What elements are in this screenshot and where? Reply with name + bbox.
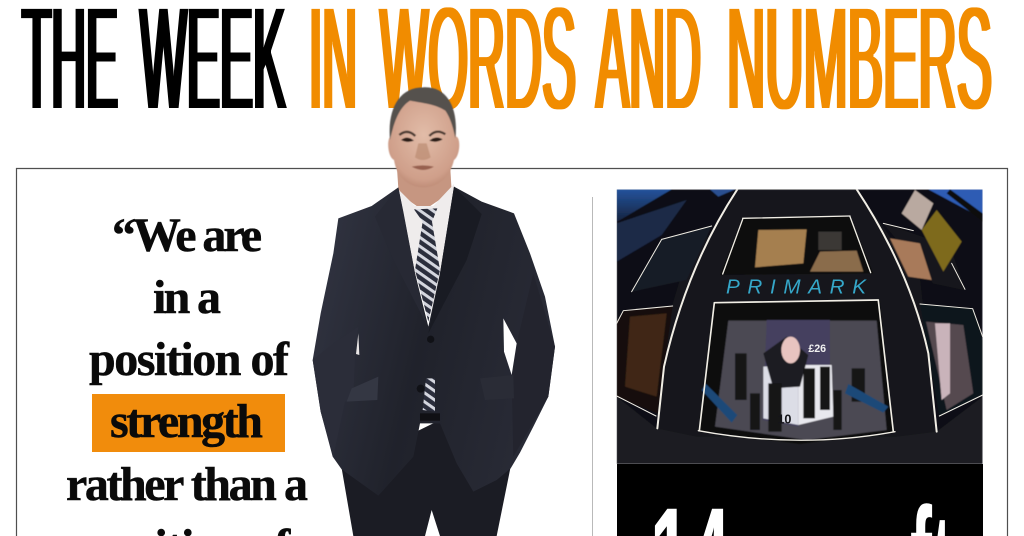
- price text: £26: [808, 343, 826, 355]
- left lower window: [617, 307, 673, 413]
- hair: [390, 87, 456, 140]
- pocket flaps: [347, 377, 378, 402]
- eyebrows: [399, 132, 445, 136]
- upper window: [720, 217, 873, 275]
- window frame light strips: [617, 189, 983, 440]
- sleeve shadow right: [512, 273, 555, 457]
- main shop window: [698, 301, 893, 444]
- blue diagonal panels: [702, 384, 737, 423]
- buttons: [427, 336, 434, 343]
- sky and building: [617, 189, 983, 464]
- quote text: “We are: [112, 209, 262, 262]
- panel: main frame: [16, 168, 1008, 536]
- title: [22, 0, 992, 141]
- quote text: strength: [110, 395, 263, 448]
- facade: [657, 189, 937, 447]
- window poster: [763, 320, 830, 427]
- head: [388, 87, 459, 187]
- left upper window: [632, 226, 712, 292]
- quote text: in a: [153, 271, 221, 324]
- quote text: [66, 209, 308, 511]
- mannequins: [735, 353, 865, 432]
- nose shadow: [415, 143, 431, 160]
- hanging signs: [902, 190, 933, 230]
- photo: executive in suit: [313, 87, 555, 536]
- window numeral: 10: [777, 412, 791, 426]
- belt: [420, 413, 440, 421]
- pavement: [617, 397, 983, 464]
- photo: Primark storefront: [617, 189, 983, 464]
- shirt: [397, 184, 454, 320]
- tie lower section: [423, 378, 435, 412]
- quote text: rather than a: [66, 458, 308, 511]
- mouth: [412, 165, 434, 170]
- quote text: position of: [89, 333, 290, 386]
- panel: black statistic band: [617, 464, 983, 536]
- right upper window: [883, 223, 965, 290]
- arm gap: [503, 318, 517, 375]
- column divider: [592, 197, 594, 536]
- trousers: [342, 420, 511, 536]
- neck: [397, 163, 452, 211]
- tie: [414, 208, 440, 322]
- jacket: [313, 187, 555, 496]
- right lower window: [920, 304, 983, 416]
- lapels: [375, 187, 426, 323]
- store sign: PRIMARK: [726, 275, 867, 298]
- eyes: [401, 138, 414, 142]
- sleeve shadow left: [313, 327, 358, 457]
- highlight: strength: [92, 394, 285, 452]
